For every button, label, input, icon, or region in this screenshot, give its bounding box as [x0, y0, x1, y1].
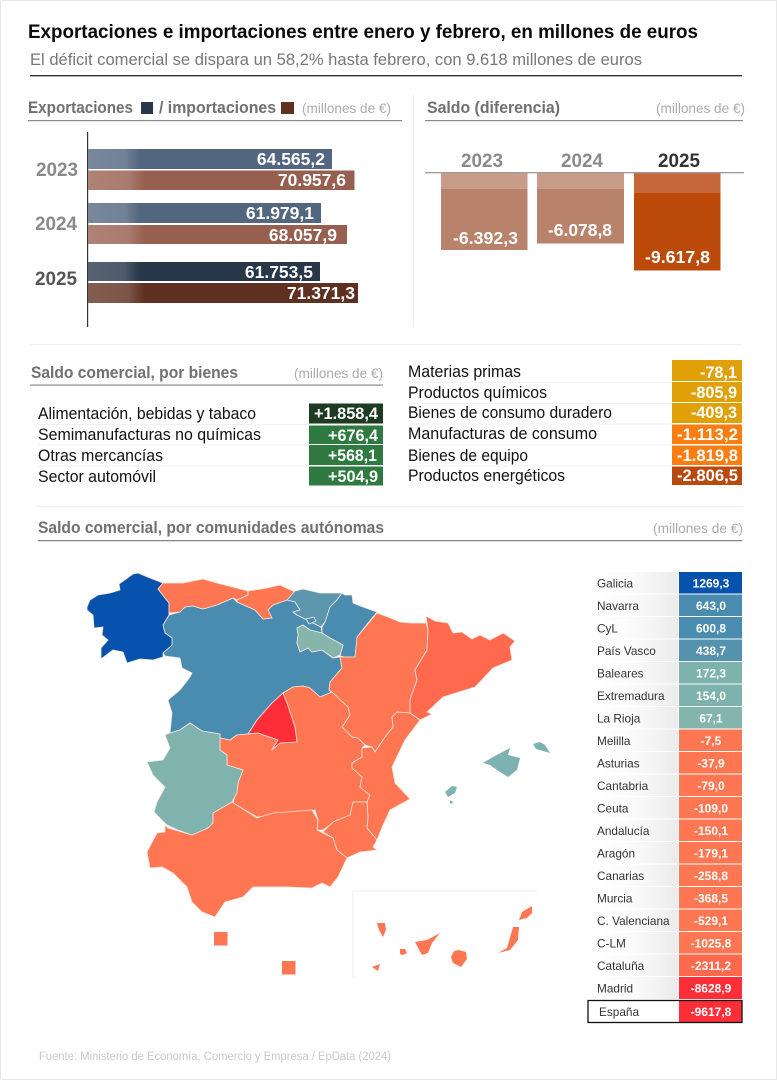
row: Galicia: Galicia	[597, 576, 633, 590]
heading: saldo: (millones de €)	[656, 101, 745, 116]
row: Navarra: 643,0	[696, 599, 726, 613]
row: Baleares: 172,3	[696, 666, 726, 680]
row: Andalucía	[587, 820, 742, 841]
heading: saldo	[425, 99, 745, 121]
enclave: Treviño	[306, 617, 316, 624]
table: negative goods: -1.113,2	[677, 426, 738, 444]
row: C. Valenciana: -529,1	[694, 914, 728, 928]
region: Castilla y León	[163, 598, 342, 740]
bar chart: exports and imports by year: 2025	[35, 268, 77, 290]
column chart: saldo by year: 2025	[658, 150, 700, 172]
row: España total	[588, 1000, 742, 1022]
heading: por comunidades autónomas: Saldo comercial, por comunidades autónomas	[38, 519, 384, 537]
table: positive goods: Otras mercancías	[38, 446, 163, 465]
row: Canarias: -258,8	[694, 869, 728, 883]
row: Madrid	[587, 977, 742, 999]
table: positive goods: +676,4	[328, 427, 379, 445]
table: negative goods: -805,9	[691, 384, 737, 402]
panel: exportaciones e importaciones	[28, 99, 402, 327]
heading: exportaciones / importaciones: Exportaciones	[28, 99, 133, 117]
row: Cataluña: -2311,2	[691, 959, 731, 973]
panel: saldo diferencia	[425, 99, 745, 270]
row: C-LM	[587, 932, 742, 954]
row: Asturias	[587, 752, 742, 774]
row: Extremadura: Extremadura	[597, 689, 665, 703]
title rule	[30, 75, 742, 76]
row: País Vasco: País Vasco	[597, 644, 656, 658]
heading: exportaciones / importaciones	[28, 99, 402, 121]
table: negative goods: Productos químicos	[408, 383, 547, 402]
column chart: saldo by year: -9.617,8	[645, 247, 710, 267]
bar chart: exports and imports by year: 71.371,3	[287, 283, 355, 303]
table: negative goods: Bienes de equipo	[408, 446, 528, 465]
row: Ceuta: -109,0	[694, 802, 728, 816]
table: negative goods	[408, 360, 742, 485]
row: País Vasco: 438,7	[696, 644, 726, 658]
table: negative goods: Bienes de consumo duradero	[408, 403, 612, 422]
bar chart: exports and imports by year: 64.565,2	[257, 149, 325, 169]
row: Ceuta: Ceuta	[597, 802, 629, 816]
heading: por bienes	[30, 364, 383, 386]
column chart: saldo by year: 2024	[561, 150, 603, 172]
region: Melilla	[282, 961, 296, 974]
column chart: saldo by year: -6.078,8	[548, 220, 612, 240]
region: Navarra	[322, 593, 377, 657]
row: Melilla: -7,5	[701, 734, 722, 748]
row: Navarra: Navarra	[597, 599, 639, 613]
row: C. Valenciana	[587, 910, 742, 931]
row: Madrid: Madrid	[597, 982, 633, 996]
region: Cataluña	[410, 616, 515, 720]
bar chart: exports and imports by year: 68.057,9	[269, 225, 337, 245]
inset frame: Canarias	[353, 891, 537, 977]
row: Ceuta	[587, 797, 742, 818]
column chart: saldo by year: -6.392,3	[453, 228, 518, 248]
region: Comunidad Valenciana	[352, 712, 420, 840]
row: Extremadura	[587, 684, 742, 706]
heading: exportaciones / importaciones: (millones de €)	[302, 101, 391, 116]
panel: saldo por bienes, positivos	[30, 364, 383, 486]
row: Aragón: -179,1	[694, 846, 728, 860]
row: CyL	[587, 617, 742, 638]
table: positive goods: Sector automóvil	[38, 467, 156, 486]
region: Castilla-La Mancha	[220, 686, 370, 830]
table: positive goods: Semimanufacturas no químicas	[38, 425, 261, 444]
region: Aragón	[329, 613, 428, 752]
heading: saldo: Saldo (diferencia)	[427, 99, 560, 117]
table: positive goods: +1.858,4	[314, 405, 379, 423]
row: C-LM: C-LM	[597, 936, 626, 950]
table: regional balance	[587, 572, 742, 1022]
region: Madrid	[248, 693, 297, 750]
row: Andalucía: Andalucía	[597, 824, 650, 838]
row: Canarias: Canarias	[597, 869, 644, 883]
table: positive goods: +568,1	[328, 447, 377, 465]
row: Melilla: Melilla	[597, 734, 631, 748]
bar chart: exports and imports by year: 2023	[36, 159, 78, 181]
table: negative goods: Productos energéticos	[408, 466, 565, 485]
row: Extremadura: 154,0	[696, 689, 726, 703]
row: Navarra	[587, 594, 742, 616]
row: Cantabria: -79,0	[697, 779, 725, 793]
row: C. Valenciana: C. Valenciana	[597, 914, 670, 928]
row: Cantabria: Cantabria	[597, 779, 649, 793]
row: Galicia: 1269,3	[693, 576, 730, 590]
table: positive goods: Alimentación, bebidas y tabaco	[38, 404, 256, 423]
table: negative goods: -1.819,8	[677, 447, 738, 465]
bar chart: exports and imports by year	[35, 132, 358, 327]
source note: Fuente: Ministerio de Economía, Comercio y Empresa / EpData (2024)	[39, 1051, 391, 1063]
row: CyL: 600,8	[696, 622, 726, 636]
table: negative goods: Manufacturas de consumo	[408, 424, 597, 443]
region: Extremadura	[147, 723, 243, 835]
table: positive goods	[38, 404, 383, 486]
row: Asturias: -37,9	[697, 756, 725, 770]
row: Baleares: Baleares	[597, 666, 644, 680]
table: negative goods: Materias primas	[408, 362, 521, 381]
bar chart: exports and imports by year: 61.979,1	[246, 203, 314, 223]
title: Exportaciones e importaciones entre enero y febrero, en millones de euros	[28, 21, 698, 43]
region: Ceuta	[214, 932, 228, 946]
subtitle: El déficit comercial se dispara un 58,2% hasta febrero, con 9.618 millones de euros	[30, 50, 642, 69]
row: La Rioja: La Rioja	[597, 712, 641, 726]
region: Murcia	[323, 802, 377, 858]
row: CyL: CyL	[597, 622, 618, 636]
table: negative goods: -409,3	[691, 404, 737, 422]
heading: por comunidades autónomas: (millones de €)	[653, 521, 743, 536]
heading: por bienes: Saldo comercial, por bienes	[31, 364, 238, 382]
row: Asturias: Asturias	[597, 756, 640, 770]
region: País Vasco	[287, 589, 342, 627]
region: La Rioja	[297, 625, 343, 658]
bar chart: exports and imports by year: 2024	[35, 213, 77, 235]
region: Andalucía	[147, 802, 347, 917]
row: La Rioja	[587, 707, 742, 728]
row: Madrid: -8628,9	[691, 982, 732, 996]
map: Spain by autonomous community	[87, 573, 550, 977]
row: Murcia: -368,5	[694, 892, 728, 906]
row: Canarias	[587, 864, 742, 886]
region: Galicia	[87, 573, 172, 663]
bar chart: exports and imports by year: 61.753,5	[245, 262, 313, 282]
table: negative goods: -2.806,5	[677, 467, 738, 485]
row: País Vasco	[587, 640, 742, 661]
row: Cataluña	[587, 954, 742, 976]
region: Cantabria	[237, 585, 295, 619]
heading: exportaciones / importaciones: / importaciones	[159, 99, 276, 117]
row: Cataluña: Cataluña	[597, 959, 645, 973]
row: La Rioja: 67,1	[699, 712, 723, 726]
heading: por comunidades autónomas	[38, 519, 743, 541]
row: Melilla	[587, 730, 742, 751]
region: Baleares	[445, 742, 550, 804]
region: Asturias	[158, 579, 248, 613]
row: Andalucía: -150,1	[694, 824, 728, 838]
row: Galicia	[587, 572, 742, 594]
heading: por bienes: (millones de €)	[294, 366, 383, 381]
column chart: saldo by year: 2023	[461, 150, 503, 172]
column chart: saldo by year	[425, 150, 744, 270]
table: positive goods: +504,9	[328, 468, 378, 486]
row: C-LM: -1025,8	[691, 936, 732, 950]
row: España total: España	[599, 1005, 639, 1019]
table: negative goods: -78,1	[700, 364, 737, 382]
row: Murcia: Murcia	[597, 892, 633, 906]
row: Cantabria	[587, 774, 742, 796]
row: Aragón	[587, 842, 742, 864]
bar chart: exports and imports by year: 70.957,6	[278, 170, 346, 190]
row: Aragón: Aragón	[597, 846, 635, 860]
region: Canarias	[372, 906, 532, 971]
row: España total: -9617,8	[691, 1005, 732, 1019]
row: Murcia	[587, 887, 742, 908]
row: Baleares	[587, 662, 742, 684]
